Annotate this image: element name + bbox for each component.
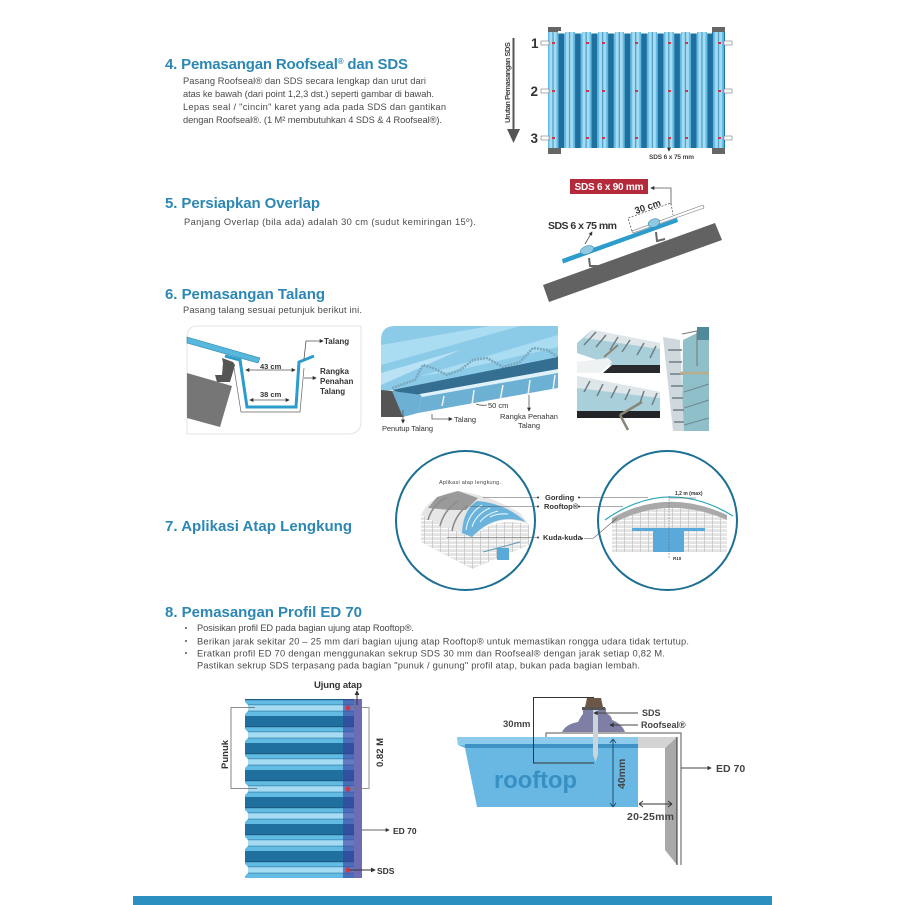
caption: Aplikasi atap lengkung. (439, 480, 501, 486)
panel: gutter perspective view (381, 326, 558, 434)
label Talang (304, 337, 349, 359)
dimension 20-25mm: 20-25mm (627, 811, 674, 823)
frame outline (234, 368, 304, 412)
photo 2 (577, 375, 660, 431)
section 4: Pemasangan Roofseal dan SDS (165, 56, 446, 125)
label Kuda-kuda: Kuda-kuda (543, 533, 583, 542)
footer bar (133, 896, 772, 905)
screw (582, 698, 605, 762)
circle: barrel roof building front view (598, 451, 737, 590)
text block 5: Panjang Overlap (bila ada) adalah 30 cm (sudut kemiringan 15º). (184, 217, 476, 227)
grey arch (612, 502, 727, 524)
label Penutup Talang: Penutup Talang (382, 424, 433, 433)
dimension 30mm (503, 698, 594, 763)
ED 70 angle profile (546, 733, 681, 865)
order arrow (503, 38, 520, 143)
label 50 cm (476, 401, 508, 410)
roof sheet installation order diagram (503, 27, 732, 161)
label 0.82 M (350, 708, 386, 788)
heading 6: 6. Pemasangan Talang (165, 286, 325, 303)
bulleted list: Berikan jarak sekitar 20 – 25 mm dari bagian ujung atap Rooftop® untuk memastikan rongga udara tidak tertutup. (197, 636, 689, 646)
label Ujung atap: Ujung atap (314, 680, 362, 691)
label Rooftop: Rooftop® (544, 502, 579, 511)
label R10: R10 (673, 556, 682, 561)
text block 4: Lepas seal / "cincin" karet yang ada pada SDS dan gantikan (183, 102, 446, 112)
building gable wall (472, 522, 529, 569)
text block 4: Pasang Roofseal® dan SDS secara lengkap dan urut dari (183, 76, 426, 86)
dimension 38 cm (250, 390, 289, 400)
label 0.82 M: 0.82 M (375, 738, 386, 767)
label ED 70 (681, 763, 745, 775)
brackets (589, 232, 665, 266)
label Rangka Penahan Talang: Talang (320, 387, 345, 396)
label Gording: Gording (545, 493, 575, 502)
corrugated edge (392, 348, 558, 388)
blue gutter (457, 737, 638, 807)
photo 3 (663, 327, 709, 431)
building side wall (421, 515, 472, 569)
screw size label: SDS 6 x 75 mm (649, 154, 694, 161)
roof slope (543, 223, 722, 302)
blue sheet (562, 218, 678, 264)
label Talang: Talang (454, 415, 476, 424)
profile ED 70 section diagram (457, 698, 745, 865)
fascia block (187, 373, 232, 427)
bulleted list: Posisikan profil ED pada bagian ujung atap Rooftop®. (197, 623, 414, 633)
circle: barrel roof building perspective (396, 451, 535, 590)
overlap top sheet (632, 205, 704, 233)
heading 5: 5. Persiapkan Overlap (165, 195, 320, 212)
text block 4 (183, 76, 446, 125)
photos of gutter installation (577, 327, 709, 431)
screws (346, 706, 350, 872)
bulleted list (185, 623, 689, 670)
dimension 30 cm: 30 cm (633, 198, 662, 217)
grey purlin ends (548, 27, 725, 154)
section 6: Pemasangan Talang (165, 286, 362, 315)
label 1.2 m max: 1,2 m (max) (675, 491, 703, 497)
profile ED 70 top view diagram (220, 680, 417, 878)
label Rangka Penahan Talang: Rangka (320, 367, 349, 376)
roof structure (421, 491, 529, 538)
label SDS 6 x 90 mm (570, 179, 671, 205)
dimension 40mm (610, 739, 628, 807)
label Rangka Penahan Talang (500, 395, 558, 430)
corrugated sheet horizontal (245, 699, 355, 878)
label Rangka Penahan Talang: Talang (518, 421, 540, 430)
wavy left edge (245, 702, 248, 876)
heading 4: dan SDS (343, 56, 408, 73)
gutter profile (225, 356, 314, 407)
frame ribs (442, 375, 555, 406)
dimension 43 cm: 43 cm (260, 362, 282, 371)
label ED 70: ED 70 (716, 763, 745, 775)
row numbers and purlin tabs: 2 (530, 84, 538, 99)
building front wall (612, 508, 727, 552)
gutter front (418, 372, 558, 413)
label Talang: Talang (324, 337, 349, 346)
label Penutup Talang (382, 410, 433, 433)
dimension 38 cm: 38 cm (260, 390, 282, 399)
label ED 70 (362, 826, 417, 836)
screw size label (649, 139, 694, 161)
label Ujung atap (314, 680, 362, 705)
roofseal (562, 708, 625, 732)
label SDS: SDS (377, 866, 395, 876)
heading 4: ® (338, 57, 344, 66)
label SDS (594, 708, 661, 718)
gutter cover end (392, 391, 422, 417)
row numbers and purlin tabs (530, 36, 732, 146)
centre axis (668, 496, 670, 558)
label Rangka Penahan Talang (304, 367, 353, 396)
label SDS 6 x 75 mm: SDS 6 x 75 mm (548, 220, 617, 232)
label 50 cm: 50 cm (488, 401, 508, 410)
top gutter band (392, 357, 558, 396)
row numbers and purlin tabs: 3 (530, 131, 538, 146)
bracket (215, 358, 235, 382)
dimension 30mm: 30mm (503, 719, 530, 730)
roofseal left (579, 244, 595, 256)
dimension 20-25mm (627, 801, 674, 823)
label Talang (432, 414, 476, 424)
order arrow: Urutan Pemasangan SDS (503, 42, 512, 123)
label Rangka Penahan Talang: Penahan (320, 377, 353, 386)
callout labels between circles (447, 493, 648, 542)
section 5: Persiapkan Overlap (165, 195, 476, 227)
bulleted list: Eratkan profil ED 70 dengan menggunakan sekrup SDS 30 mm dan Roofseal® dengan jarak setiap 0,82 M. (197, 648, 665, 658)
section 7: Aplikasi Atap Lengkung heading: 7. Aplikasi Atap Lengkung (165, 518, 352, 535)
label Kuda-kuda (447, 518, 617, 542)
text block 4: atas ke bawah (dari point 1,2,3 dst.) seperti gambar di bawah. (183, 89, 434, 99)
label Rangka Penahan Talang: Rangka Penahan (500, 412, 558, 421)
door (497, 548, 509, 560)
label SDS 6 x 75 mm (548, 220, 617, 244)
scalloped edges (558, 31, 712, 34)
section 8: Pemasangan Profil ED 70 (165, 604, 689, 670)
label Roofseal: Roofseal® (641, 720, 686, 730)
overlap diagram (543, 179, 722, 302)
door (632, 528, 705, 552)
label Punuk: Punuk (220, 739, 231, 769)
text block 4: dengan Roofseal®. (1 M² membutuhkan 4 SDS & 4 Roofseal®). (183, 115, 442, 125)
label Punuk (220, 708, 257, 788)
photo 1 (577, 329, 660, 373)
blue roof line (605, 497, 733, 520)
bulleted list: Pastikan sekrup SDS terpasang pada bagian "punuk / gunung" profil atap, bukan pada bagian lembah. (197, 660, 640, 670)
corrugated sheet (548, 32, 725, 148)
blue roof panels (462, 501, 526, 537)
heading 8: 8. Pemasangan Profil ED 70 (165, 604, 362, 621)
roof surface (381, 326, 558, 392)
text block 6: Pasang talang sesuai petunjuk berikut ini. (183, 305, 362, 315)
dimension 40mm: 40mm (616, 759, 628, 789)
screws (552, 42, 721, 139)
fascia (381, 390, 403, 417)
roof sheet (187, 337, 260, 363)
panel: gutter cross-section (187, 326, 361, 434)
label SDS: SDS (642, 708, 661, 718)
heading 4: 4. Pemasangan Roofseal (165, 56, 338, 73)
label SDS 6 x 90 mm: SDS 6 x 90 mm (574, 182, 644, 193)
label SDS (350, 866, 395, 876)
label ED 70: ED 70 (393, 826, 417, 836)
roofseal right (647, 217, 661, 229)
row numbers and purlin tabs: 1 (531, 36, 539, 51)
ED 70 overlay (343, 699, 362, 878)
dimension 43 cm (246, 362, 295, 371)
rooftop logo: rooftop (494, 767, 577, 794)
label Roofseal (610, 720, 686, 730)
dimension 30 cm (628, 198, 673, 231)
